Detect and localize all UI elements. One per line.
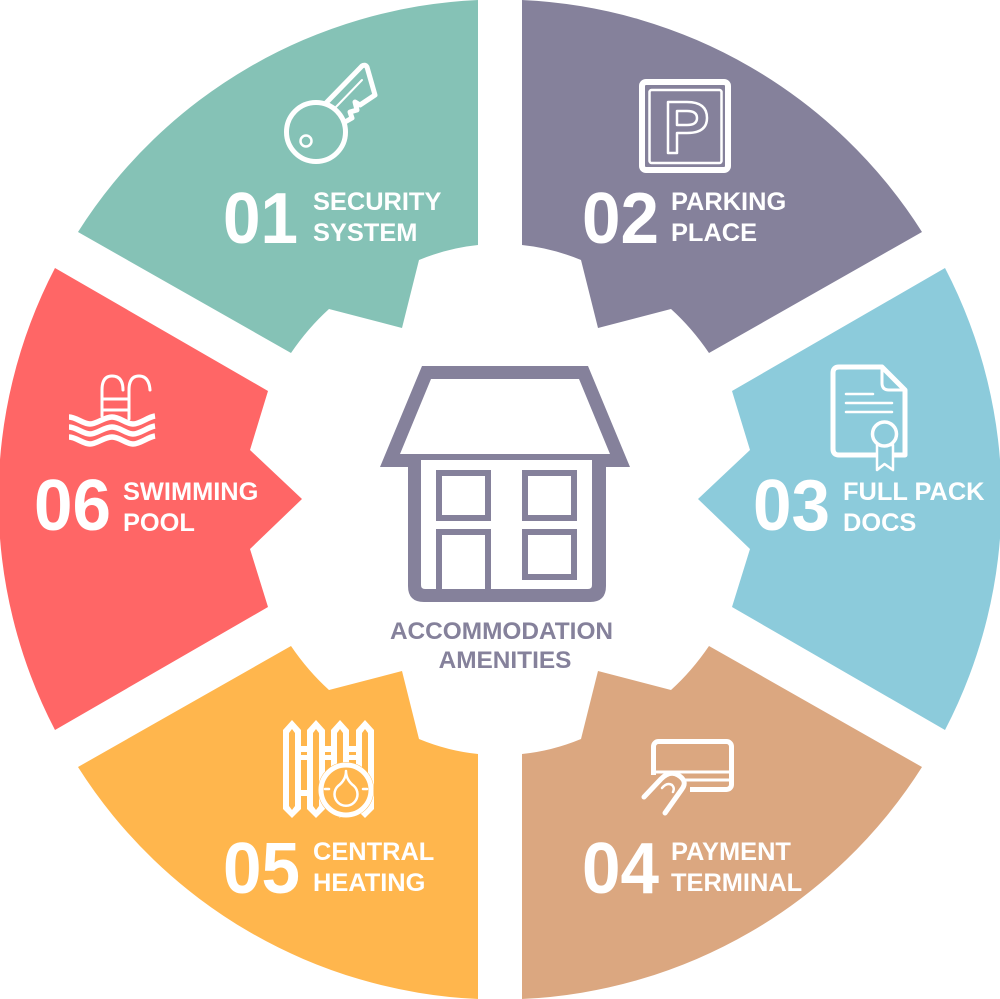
label: full pack docs: DOCS	[843, 509, 916, 537]
label: central heating: HEATING	[313, 869, 425, 897]
number 06: 06	[34, 466, 111, 546]
label: full pack docs: FULL PACK	[843, 478, 985, 506]
number 05: 05	[223, 829, 300, 909]
label: central heating: CENTRAL	[313, 838, 434, 866]
label: swimming pool: POOL	[123, 509, 195, 537]
number 02: 02	[582, 179, 659, 259]
label: parking place: PLACE	[671, 219, 757, 247]
panel: 04 payment terminal	[522, 646, 922, 999]
panel: 05 central heating	[78, 646, 478, 999]
title: accommodation amenities: AMENITIES	[439, 647, 571, 674]
panel: 06 swimming pool	[0, 268, 302, 730]
label: security system: SECURITY	[313, 188, 441, 216]
title: accommodation amenities: ACCOMMODATION	[390, 618, 613, 645]
icon: parking sign	[642, 82, 728, 170]
icon: key	[286, 65, 375, 162]
label: security system: SYSTEM	[313, 219, 417, 247]
icon: central house	[380, 366, 630, 602]
panel: 01 security system	[78, 0, 478, 353]
label: swimming pool: SWIMMING	[123, 478, 258, 506]
number 04: 04	[582, 829, 659, 909]
label: parking place: PARKING	[671, 188, 786, 216]
icon: pool ladder and waves	[69, 376, 155, 444]
icon: document with seal	[833, 367, 905, 470]
label: payment terminal: TERMINAL	[671, 869, 802, 897]
number 01: 01	[223, 179, 298, 259]
label: payment terminal: PAYMENT	[671, 838, 791, 866]
panel: 03 full pack docs	[698, 268, 1000, 730]
number 03: 03	[753, 466, 830, 546]
icon: card and finger	[640, 742, 732, 820]
panel: 02 parking place	[522, 0, 922, 353]
icon: radiator with dial	[283, 720, 374, 818]
